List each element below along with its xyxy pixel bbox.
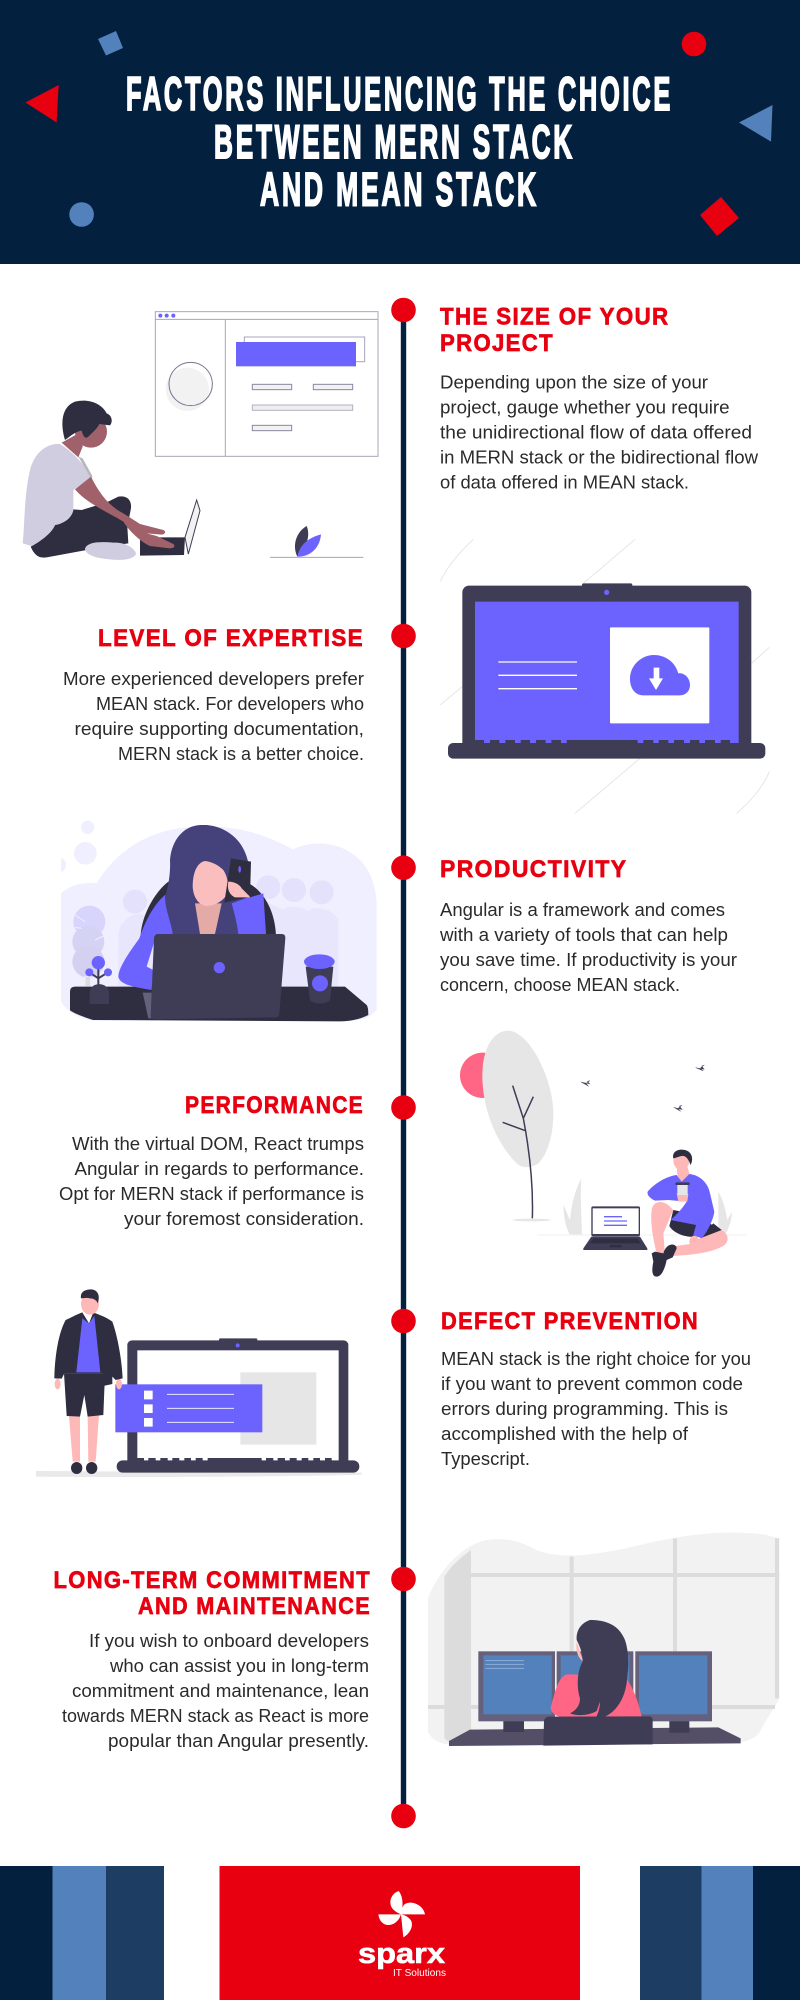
title [126,67,673,216]
text: performance: Opt for MERN stack if performance is [59,1184,364,1204]
text: level of expertise: More experienced developers prefer [63,669,364,689]
illustration: woman at three monitors [428,1533,779,1746]
text: productivity: Angular is a framework and comes [440,900,725,920]
text: performance: With the virtual DOM, React trumps [72,1134,364,1154]
text: long-term commitment [62,1631,369,1751]
text: the size of your project: Depending upon the size of your [440,372,708,392]
illustration: laptop with cloud download [440,539,769,813]
heading: long-term commitment and maintenance: LONG-TERM COMMITMENT [54,1567,371,1594]
text: the size of your project: the unidirectional flow of data offered [440,422,752,442]
heading: the size of your project [440,304,670,357]
text: long-term commitment: who can assist you in long-term [109,1656,369,1676]
text: level of expertise: require supporting documentation, [74,719,364,739]
text: defect prevention: MEAN stack is the right choice for you [441,1349,751,1369]
text: performance: your foremost consideration. [124,1209,364,1229]
text: productivity [439,900,737,995]
text: long-term commitment: If you wish to onboard developers [89,1631,369,1651]
illustration: person with laptop and web page [23,312,378,560]
decorative shapes [26,31,772,236]
text: long-term commitment: popular than Angular presently. [108,1731,369,1751]
text: long-term commitment: commitment and maintenance, lean [72,1681,369,1701]
heading: level of expertise: LEVEL OF EXPERTISE [98,625,364,652]
text: defect prevention: Typescript. [441,1449,530,1469]
text: productivity: with a variety of tools that can help [439,925,728,945]
heading: long-term commitment and maintenance [54,1567,371,1620]
text: productivity: concern, choose MEAN stack. [440,975,680,995]
icon: pinwheel [378,1891,425,1937]
text: level of expertise: MERN stack is a better choice. [118,744,364,764]
text: level of expertise [63,669,364,764]
text: the size of your project: project, gauge whether you require [440,398,730,418]
text: the size of your project: of data offered in MEAN stack. [440,472,689,492]
heading: performance: PERFORMANCE [185,1092,364,1119]
illustration: woman on phone at laptop [61,821,377,1021]
illustration: man sitting outdoors with laptop [460,1031,747,1277]
heading: the size of your project: THE SIZE OF YOUR [440,304,670,330]
text: performance: Angular in regards to performance. [74,1159,364,1179]
text: defect prevention: errors during programming. This is [441,1399,728,1419]
text: defect prevention [441,1349,751,1469]
illustration: man standing by laptop with list [36,1289,362,1477]
timeline [391,298,416,1828]
logo: sparx IT Solutions [358,1891,446,1979]
text: performance [59,1134,364,1229]
text: productivity: you save time. If productivity is your [440,950,737,970]
heading: defect prevention: DEFECT PREVENTION [441,1308,699,1335]
text: level of expertise: MEAN stack. For developers who [96,694,364,714]
heading: the size of your project: PROJECT [440,330,554,357]
text: defect prevention: if you want to prevent common code [441,1374,743,1394]
text: long-term commitment: towards MERN stack as React is more [62,1706,369,1726]
logo: sparx IT Solutions: sparx [358,1938,445,1970]
heading: productivity: PRODUCTIVITY [440,856,628,883]
header banner [0,0,800,264]
heading: long-term commitment and maintenance: AND MAINTENANCE [138,1593,371,1620]
text: defect prevention: accomplished with the help of [441,1424,689,1444]
text: the size of your project [440,372,759,492]
footer [0,1866,800,2000]
text: the size of your project: in MERN stack or the bidirectional flow [440,448,759,468]
title: AND MEAN STACK [260,162,539,216]
logo: sparx IT Solutions: IT Solutions [393,1967,446,1979]
